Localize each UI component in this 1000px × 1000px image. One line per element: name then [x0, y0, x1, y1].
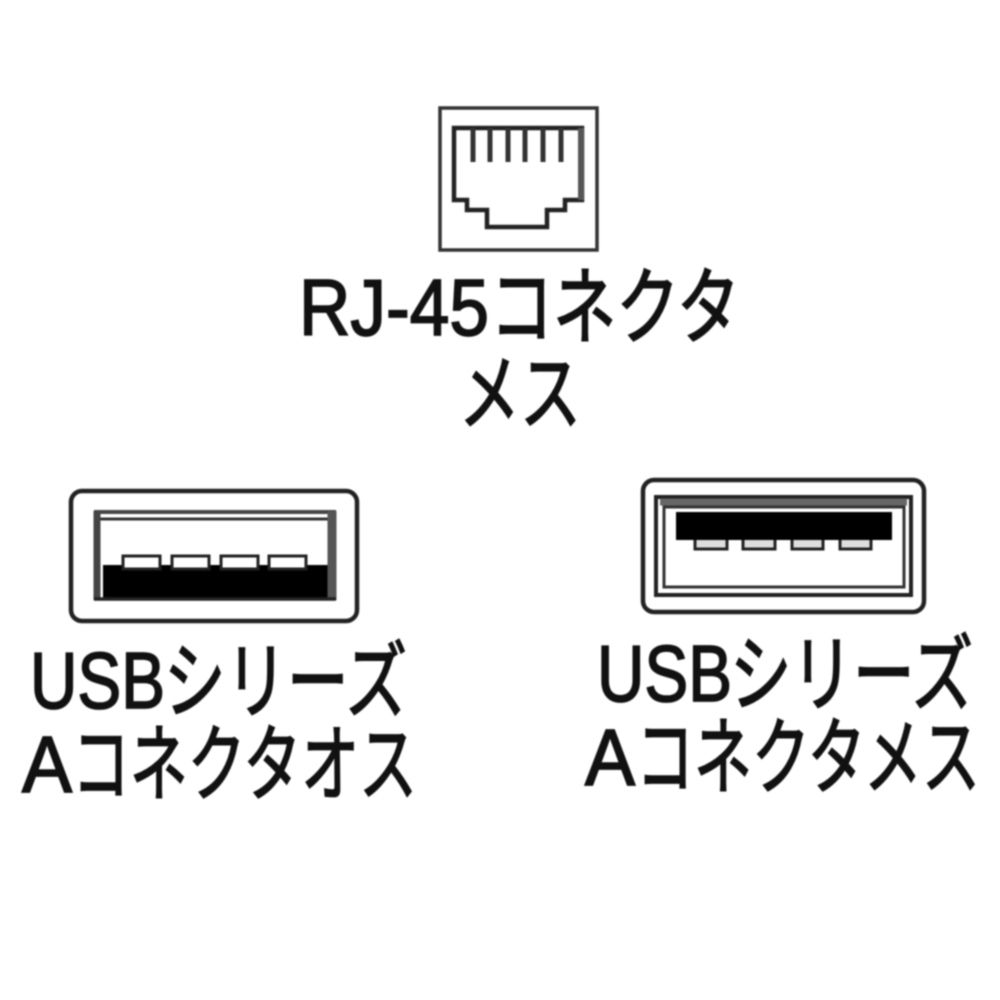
icon: USB A male connector	[71, 491, 357, 621]
label: RJ-45 connector female	[299, 261, 740, 441]
label: USB series A connector female	[585, 628, 980, 805]
label: USB series A connector male	[22, 635, 417, 812]
label: RJ-45 connector female: メス	[459, 347, 581, 441]
label: USB series A connector male: A	[22, 720, 73, 809]
label: USB series A connector female: USB	[597, 629, 732, 718]
label: RJ-45 connector female: RJ-45	[299, 263, 489, 352]
label: USB series A connector male: コネクタオス	[72, 718, 417, 812]
label: USB series A connector male: シリーズ	[164, 635, 407, 729]
label: USB series A connector female: A	[585, 713, 636, 802]
label: RJ-45 connector female: コネクタ	[490, 261, 740, 355]
label: USB series A connector male: USB	[30, 636, 165, 725]
icon: RJ-45 female connector	[440, 108, 597, 250]
icon: USB A female connector	[643, 480, 924, 612]
